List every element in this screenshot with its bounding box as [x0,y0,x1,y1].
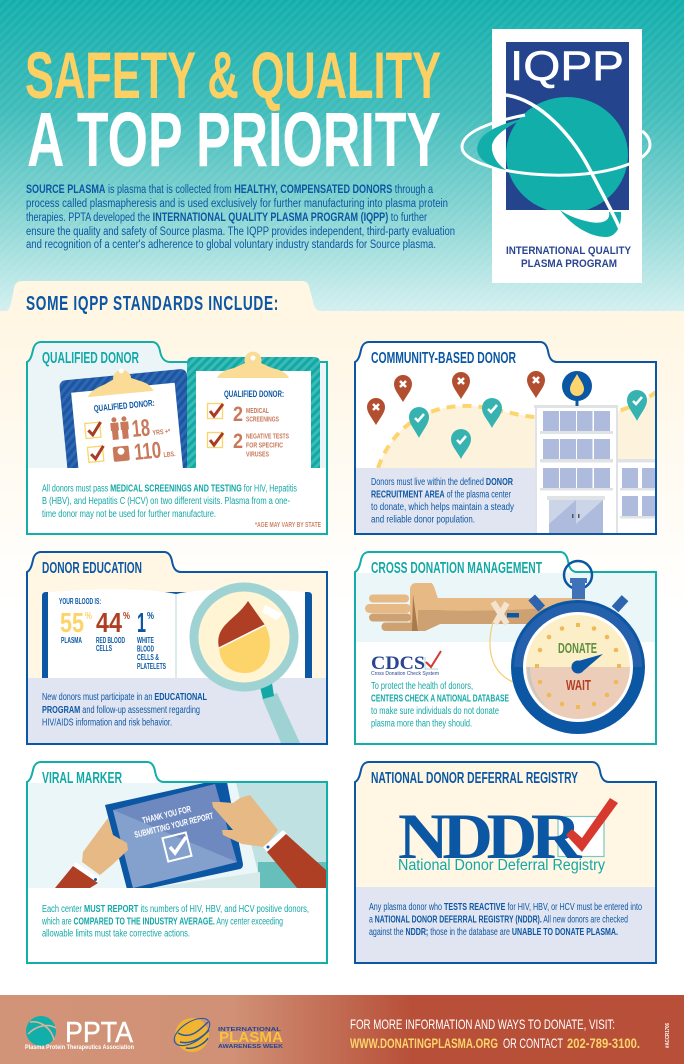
intro paragraph: ensure the quality and safety of Source plasma. The IQPP provides independent, third-party evaluation [26,226,455,238]
heading tab: some IQPP standards include: SOME IQPP STANDARDS INCLUDE: [26,293,279,315]
heading: VIRAL MARKER [42,770,122,787]
text block: to donate, which helps maintain a steady [371,502,514,513]
blood stats: RED BLOOD [96,636,125,645]
blood stats: % [85,611,92,622]
clipboard: blue: QUALIFIED DONOR: [93,398,155,414]
text block: All donors must pass MEDICAL SCREENINGS AND TESTING for HIV, Hepatitis [42,484,297,494]
plasma center building [534,371,656,534]
text block [42,484,297,520]
heading: NATIONAL DONOR DEFERRAL REGISTRY [371,770,578,787]
blood stats: WHITE [137,636,154,645]
text block: time donor may not be used for further manufacture. [42,509,216,520]
clipboard: blue: 110 [133,436,162,465]
blood stats: 44 [96,607,122,638]
panel: community-based donor [355,342,656,534]
clipboard: teal: QUALIFIED DONOR: [224,389,284,399]
blood stats: CELLS [96,644,112,653]
blood stats: YOUR BLOOD IS: [59,597,101,606]
text block: against the NDDR; those in the database are UNABLE TO DONATE PLASMA. [369,927,618,938]
text block: Donors must live within the defined DONOR [371,477,514,488]
clipboard: blue: LBS. [163,451,176,459]
contact information: 202-789-3100. [567,1035,640,1051]
stopwatch: DONATE [558,640,597,657]
teal pins [409,390,647,459]
text block: plasma more than they should. [371,718,472,730]
IQPP logo: IQPP [510,42,624,89]
intro paragraph: SOURCE PLASMA is plasma that is collected from HEALTHY, COMPENSATED DONORS through a [26,184,433,196]
text block: allowable limits must take corrective actions. [42,928,190,940]
CDCS logo: CDCS [371,653,425,674]
contact information [350,1016,640,1051]
text block: Each center MUST REPORT its numbers of HIV, HBV, and HCV positive donors, [42,904,309,915]
IQPP logo [462,29,650,283]
blood stats: % [123,611,130,622]
header background [0,0,684,312]
text block: CENTERS CHECK A NATIONAL DATABASE [371,694,509,704]
text block: B (HBV), and Hepatitis C (HCV) on two different visits. Plasma from a one- [42,496,290,507]
document code: #ACCR1706 [665,1023,671,1048]
CDCS logo [371,651,441,677]
text block [41,904,309,940]
blood stats: CELLS & [137,653,159,662]
intro paragraph: therapies. PPTA developed the INTERNATIONAL QUALITY PLASMA PROGRAM (IQPP) to further [26,212,427,224]
text block [371,477,514,526]
clipboard: teal: MEDICAL [246,406,269,415]
open book [42,589,312,678]
stopwatch [511,561,645,734]
red pins [367,371,545,425]
NDDR logo: National Donor Deferral Registry [398,857,605,874]
blood stats [59,597,166,671]
title: SAFETY & QUALITY [25,38,441,112]
clipboard: teal: SCREENINGS [246,414,279,424]
heading: QUALIFIED DONOR [42,350,139,367]
text block [42,692,207,728]
heading tab: some IQPP standards include [6,281,322,315]
text block [369,902,642,938]
text block: RECRUITMENT AREA of the plasma center [371,490,511,500]
plasma awareness week logo: AWARENESS WEEK [218,1044,284,1050]
IQPP logo: PLASMA PROGRAM [521,258,617,270]
text block: which are COMPARED TO THE INDUSTRY AVERAGE. Any center exceeding [41,916,283,928]
clipboard: blue: 18 [131,414,151,443]
clipboard: teal: VIRUSES [246,450,269,458]
text area [356,468,538,533]
clipboard: teal: NEGATIVE TESTS [246,432,289,440]
blood stats: 55 [60,607,84,638]
PPTA logo [25,1016,134,1051]
footer [0,995,684,1064]
title: A TOP PRIORITY [27,97,441,183]
clipboard: teal: 2 [233,403,243,426]
clipboard: teal: FOR SPECIFIC [246,440,283,450]
magnifying glass [194,587,300,743]
panel: donor education [27,552,327,744]
text block [371,681,509,730]
arm [365,583,585,682]
text block: a NATIONAL DONOR DEFERRAL REGISTRY (NDDR). All new donors are checked [369,914,628,926]
clipboard: blue: YRS +* [152,428,171,437]
clipboard: teal: 2 [233,430,243,453]
NDDR logo: NDDR [398,801,583,873]
text block: to make sure individuals do not donate [371,706,499,717]
panel: qualified donor [27,342,327,534]
panel: viral marker [27,762,327,963]
intro paragraph [26,184,455,251]
recruitment area map [378,392,656,468]
text block: To protect the health of donors, [371,681,473,692]
text block: HIV/AIDS information and risk behavior. [42,718,172,728]
IQPP logo: INTERNATIONAL QUALITY [506,245,632,257]
title [25,38,441,183]
blood stats: 1 [137,607,146,638]
plasma awareness week logo: INTERNATIONAL [218,1027,282,1033]
plasma awareness week logo [170,1013,284,1052]
heading: DONOR EDUCATION [42,560,142,577]
panel: cross donation management [355,552,656,744]
plasma awareness week logo: PLASMA [219,1029,283,1046]
contact information: WWW.DONATINGPLASMA.ORG [350,1035,498,1051]
text block: New donors must participate in an EDUCATIONAL [42,692,207,703]
clipboard: blue [60,368,187,468]
text block: PROGRAM and follow-up assessment regarding [42,705,200,716]
stopwatch: WAIT [566,677,591,694]
text block: and reliable donor population. [371,514,475,526]
footnote: *AGE MAY VARY BY STATE [255,520,321,529]
heading: COMMUNITY-BASED DONOR [371,350,516,367]
heading: CROSS DONATION MANAGEMENT [371,560,542,577]
blood stats: BLOOD [137,644,154,654]
page background [0,311,684,611]
intro paragraph: process called plasmapheresis and is used exclusively for further manufacturing into plasma protein [26,198,448,210]
CDCS logo: Cross Donation Check System [371,671,439,677]
tablet illustration: THANK YOU FOR [141,804,192,826]
PPTA logo: Plasma Protein Therapeutics Association [25,1044,134,1051]
intro paragraph: and recognition of a center's adherence to global voluntary industry standards for Source plasma. [26,239,436,251]
tablet illustration [28,779,326,893]
PPTA logo: PPTA [65,1017,134,1049]
blood stats: % [147,611,154,622]
blood stats: PLATELETS [137,662,166,671]
panel: national donor deferral registry [355,762,656,963]
clipboard: teal [187,352,320,468]
tablet illustration: SUBMITTING YOUR REPORT [133,810,215,840]
contact information: OR CONTACT [503,1035,563,1051]
blood stats: PLASMA [61,636,82,645]
